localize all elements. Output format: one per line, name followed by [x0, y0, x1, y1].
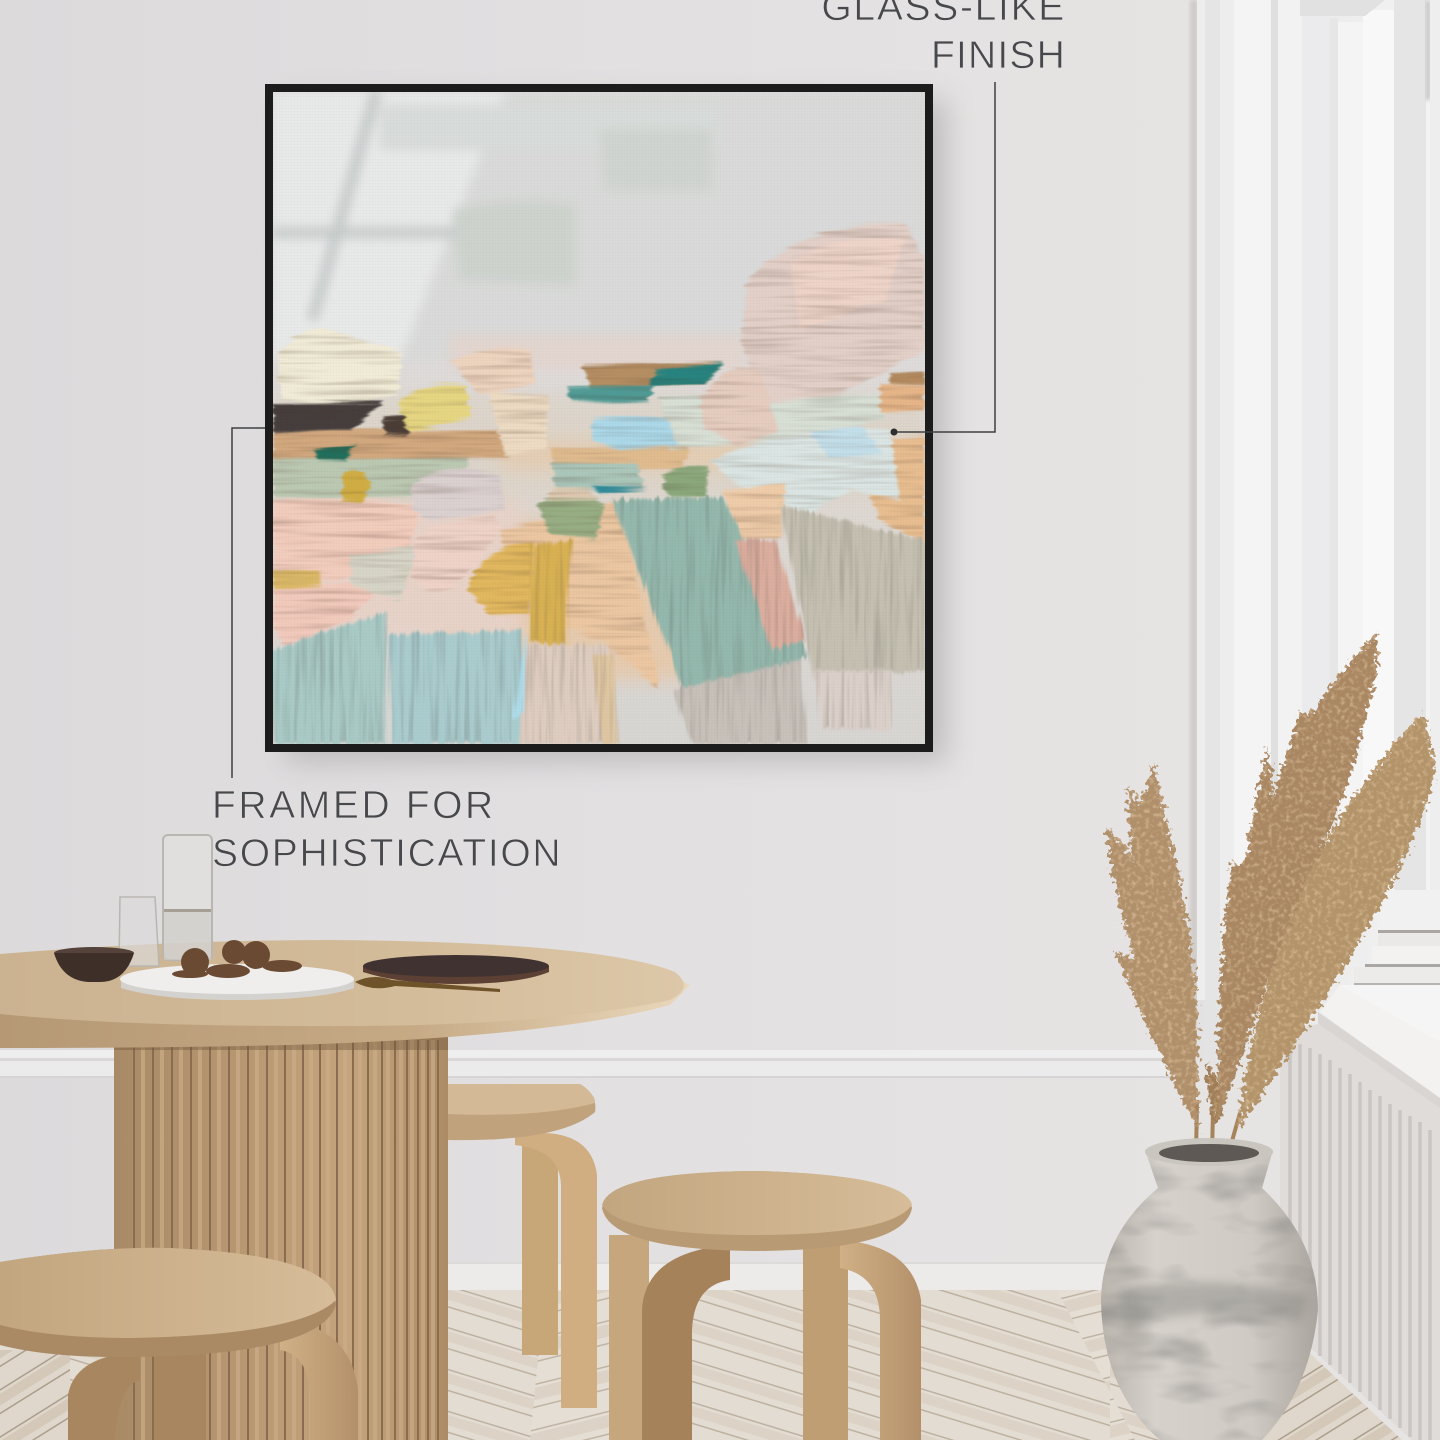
herringbone floor	[0, 1290, 1402, 1440]
back stool	[448, 1084, 597, 1408]
plumes	[1106, 633, 1436, 1130]
canvas weave	[276, 96, 882, 718]
upper strokes and window reflection	[274, 94, 742, 366]
callout: glass-like finish: FINISH	[931, 34, 1066, 77]
artwork frame	[265, 84, 947, 762]
front left stool	[0, 1248, 358, 1440]
spoon	[355, 977, 500, 992]
soft underpainting wash	[280, 398, 925, 686]
stems	[1196, 1100, 1240, 1155]
radiator	[1280, 1024, 1440, 1440]
callout: framed for sophistication: SOPHISTICATION	[212, 832, 562, 875]
glass tumbler	[119, 897, 159, 966]
callout: framed for sophistication	[212, 428, 562, 875]
nuts	[172, 940, 302, 978]
abstract painting	[273, 92, 925, 744]
stacked books on sill	[1354, 930, 1440, 985]
tableware	[54, 835, 549, 1000]
dark plate	[363, 955, 549, 984]
pampas grass	[1106, 633, 1436, 1155]
marble plate	[120, 964, 354, 1000]
bowl	[54, 947, 134, 982]
window frame	[1190, 0, 1440, 1060]
front right stool	[602, 1171, 921, 1440]
glass jug	[163, 835, 212, 960]
table top	[0, 940, 690, 1048]
chair rail and skirting	[0, 1050, 1175, 1290]
callout: glass-like finish	[821, 0, 1066, 436]
callout: framed for sophistication: FRAMED FOR	[212, 784, 496, 827]
ceramic vase	[1101, 1138, 1318, 1440]
table pedestal	[114, 1030, 448, 1440]
window sill	[1318, 985, 1440, 1108]
vertical strokes	[273, 497, 925, 744]
horizontal strokes: underlayers	[273, 372, 925, 690]
horizontal strokes: impasto dabs	[273, 222, 925, 615]
